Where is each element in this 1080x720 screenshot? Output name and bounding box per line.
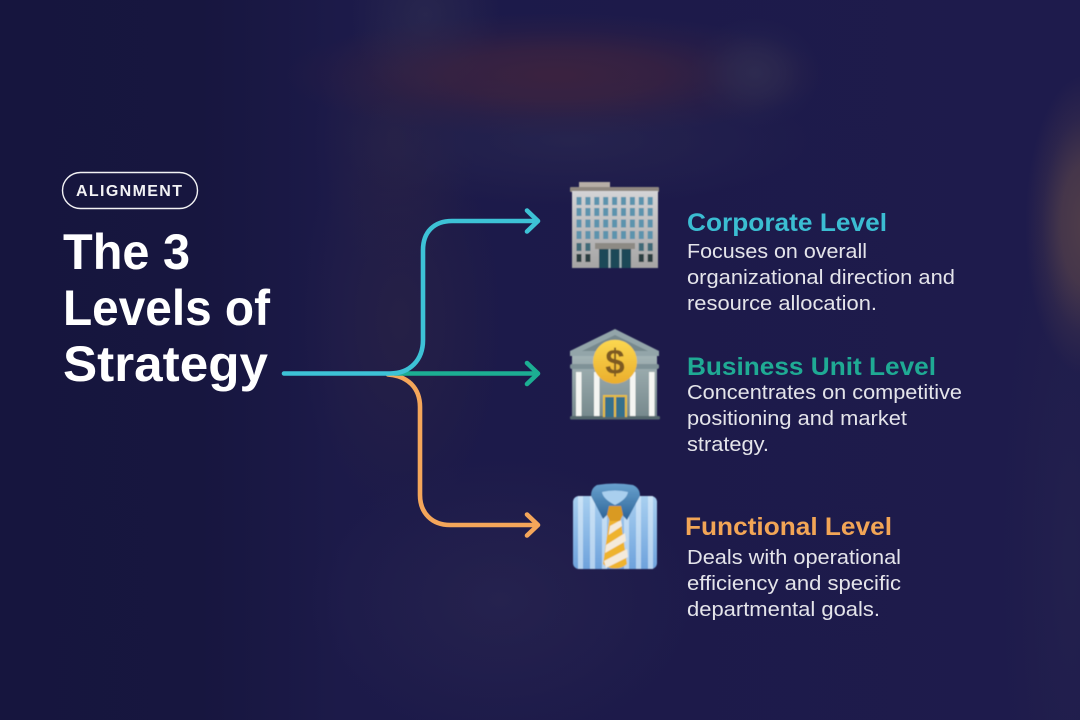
icon: bank with dollar coin: $ (605, 343, 625, 382)
description: Functional Level: Deals with operational (687, 546, 901, 569)
description: Functional Level: efficiency and specific (687, 572, 901, 595)
title: Strategy (63, 336, 268, 392)
heading: Functional Level: Functional Level (685, 513, 892, 541)
description: Functional Level (687, 546, 901, 621)
item: Business Unit Level (687, 353, 962, 456)
badge: ALIGNMENT (62, 172, 198, 208)
icon: office building (570, 182, 659, 268)
arrow: functional level (388, 374, 538, 536)
description: Business Unit Level (687, 381, 962, 456)
description: Corporate Level: Focuses on overall (687, 240, 867, 263)
description: Business Unit Level: positioning and market (687, 407, 907, 430)
heading: Business Unit Level: Business Unit Level (687, 353, 936, 381)
heading: Corporate Level: Corporate Level (687, 209, 887, 237)
arrow: corporate level (284, 210, 538, 374)
description: Business Unit Level: Concentrates on competitive (687, 381, 962, 404)
badge: ALIGNMENT: ALIGNMENT (76, 183, 182, 200)
description: Corporate Level (687, 240, 955, 315)
branching arrows (284, 210, 538, 536)
title (63, 224, 270, 392)
icon: shirt and tie (573, 484, 657, 569)
arrow: business unit level (395, 363, 538, 384)
description: Corporate Level: resource allocation. (687, 292, 877, 315)
description: Business Unit Level: strategy. (687, 433, 769, 456)
title: Levels of (63, 280, 270, 336)
description: Corporate Level: organizational direction and (687, 266, 955, 289)
icon: bank with dollar coin (570, 329, 660, 420)
title: The 3 (63, 224, 190, 280)
item: Corporate Level (687, 209, 955, 315)
description: Functional Level: departmental goals. (687, 598, 880, 621)
item: Functional Level (685, 513, 901, 621)
